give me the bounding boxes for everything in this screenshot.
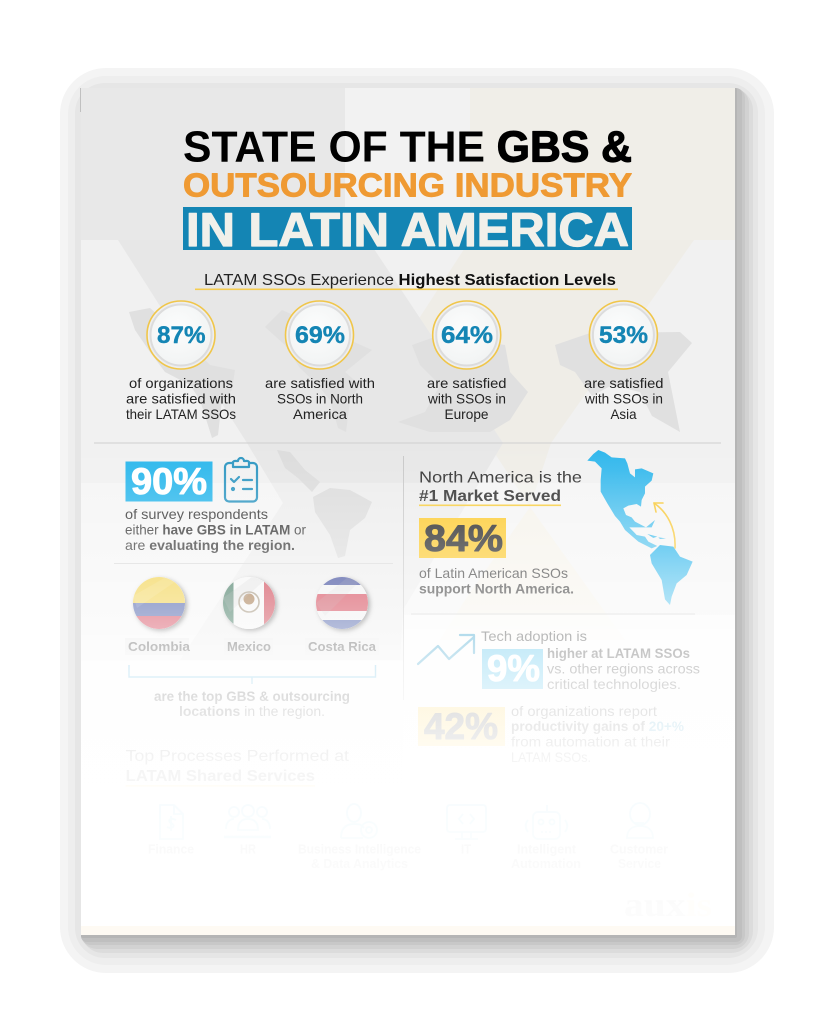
flags bbox=[125, 577, 379, 655]
label: Mexico: Mexico bbox=[227, 640, 271, 654]
paper background bbox=[81, 88, 735, 935]
flag: Costa Rica bbox=[316, 577, 368, 629]
process: IT: IT bbox=[461, 842, 471, 856]
stat: 53% Asia: 53% bbox=[599, 322, 648, 349]
process: Business Intelligence: & Data Analytics bbox=[311, 857, 408, 871]
icon: trend arrow bbox=[418, 635, 474, 664]
process: Finance bbox=[148, 805, 194, 856]
satisfaction heading: LATAM SSOs Experience Highest Satisfaction Levels bbox=[204, 272, 616, 289]
process: Finance: Finance bbox=[148, 842, 194, 856]
stat: 69% North America: 69% bbox=[295, 322, 345, 349]
stat: 64% Europe: with SSOs in bbox=[427, 390, 506, 406]
process: Business Intelligence bbox=[298, 804, 421, 871]
title line 3 banner: IN LATIN AMERICA bbox=[186, 203, 629, 256]
top locations text: locations in the region. bbox=[179, 704, 325, 719]
stat: 53% Asia: Asia bbox=[610, 406, 637, 422]
process: IT bbox=[447, 805, 486, 856]
top processes heading bbox=[126, 748, 350, 787]
callout: North America #1 market bbox=[419, 470, 582, 596]
page shadow bbox=[60, 68, 774, 973]
callout: tech adoption: Tech adoption is bbox=[481, 628, 587, 644]
process: Customer Service bbox=[610, 803, 668, 871]
callout: North America #1 market: #1 Market Served bbox=[419, 488, 561, 505]
top processes heading: Top Processes Performed at bbox=[126, 748, 350, 765]
callout: 90% respondents: of survey respondents bbox=[125, 506, 268, 522]
callout: North America #1 market: of Latin American SSOs bbox=[419, 565, 568, 581]
bracket bbox=[129, 665, 376, 684]
callout: North America #1 market: North America is the bbox=[419, 470, 582, 486]
process: Customer Service: Customer bbox=[610, 842, 668, 856]
callout: 90% respondents: either have GBS in LATAM or bbox=[125, 522, 306, 538]
stat: 87% LATAM bbox=[126, 301, 236, 422]
arrow: south to north america bbox=[654, 503, 675, 548]
callout: productivity gains bbox=[418, 703, 685, 765]
stat: 69% North America: SSOs in North bbox=[277, 390, 363, 406]
flag: Mexico bbox=[223, 577, 275, 629]
stat: 53% Asia: are satisfied bbox=[584, 375, 664, 391]
callout: 90% respondents: are evaluating the region. bbox=[125, 537, 295, 553]
stat: 53% Asia bbox=[584, 301, 664, 422]
process: HR bbox=[224, 805, 271, 856]
process: Customer Service: Service bbox=[618, 857, 661, 871]
callout: tech adoption: vs. other regions across bbox=[547, 660, 700, 676]
callout: tech adoption: critical technologies. bbox=[547, 676, 681, 692]
stat: 64% Europe bbox=[427, 301, 506, 422]
label: Costa Rica: Costa Rica bbox=[308, 640, 377, 654]
stat: 87% LATAM: 87% bbox=[157, 322, 206, 349]
process: Intelligent Automation: Intelligent bbox=[517, 842, 577, 856]
callout: productivity gains: from automation at their bbox=[511, 734, 670, 750]
world map backgrounds bbox=[129, 308, 692, 438]
callout: 90% respondents: 90% bbox=[131, 461, 207, 502]
title line 2: OUTSOURCING INDUSTRY bbox=[183, 166, 632, 204]
callout: tech adoption bbox=[481, 628, 700, 692]
flag: Colombia bbox=[133, 577, 185, 629]
callout: North America #1 market: 84% bbox=[424, 518, 503, 559]
map: latin america background bbox=[277, 450, 372, 558]
top locations text: are the top GBS & outsourcing bbox=[154, 689, 350, 704]
stat: 87% LATAM: their LATAM SSOs bbox=[126, 406, 236, 422]
stat: 64% Europe: are satisfied bbox=[427, 375, 506, 391]
callout: tech adoption: 9% bbox=[487, 648, 540, 689]
top locations text bbox=[154, 689, 350, 719]
stat: 53% Asia: with SSOs in bbox=[584, 390, 663, 406]
stat: 64% Europe: Europe bbox=[444, 406, 489, 422]
callout: productivity gains: productivity gains of 20+% bbox=[511, 718, 685, 734]
process: Business Intelligence: Business Intelligence bbox=[298, 842, 421, 856]
process: Intelligent Automation: Automation bbox=[511, 857, 581, 871]
callout: North America #1 market: support North America. bbox=[419, 580, 574, 596]
callout: productivity gains: 42% bbox=[424, 706, 498, 747]
process: Intelligent Automation bbox=[511, 805, 581, 871]
stat: 87% LATAM: of organizations bbox=[129, 375, 233, 391]
logo: auxis: aux is bbox=[624, 887, 712, 924]
stat: 64% Europe: 64% bbox=[441, 322, 493, 349]
stat: 69% North America bbox=[265, 301, 375, 422]
title bbox=[183, 122, 632, 256]
callout: tech adoption: higher at LATAM SSOs bbox=[547, 645, 690, 661]
callout: 90% respondents bbox=[125, 458, 306, 553]
top processes heading: LATAM Shared Services bbox=[126, 768, 315, 785]
stat: 69% North America: are satisfied with bbox=[265, 375, 375, 391]
stat: 69% North America: America bbox=[293, 406, 347, 422]
title line 1: STATE OF THE GBS & bbox=[183, 122, 632, 172]
stat: 87% LATAM: are satisfied with bbox=[126, 390, 236, 406]
fade overlay bbox=[81, 440, 735, 935]
icon: clipboard checklist bbox=[225, 458, 257, 502]
label: Colombia: Colombia bbox=[128, 640, 191, 654]
callout: productivity gains: of organizations report bbox=[511, 703, 657, 719]
bottom strip bbox=[81, 926, 735, 935]
callout: productivity gains: LATAM SSOs. bbox=[511, 749, 591, 765]
map: Americas bbox=[587, 450, 693, 605]
process: HR: HR bbox=[240, 842, 256, 856]
